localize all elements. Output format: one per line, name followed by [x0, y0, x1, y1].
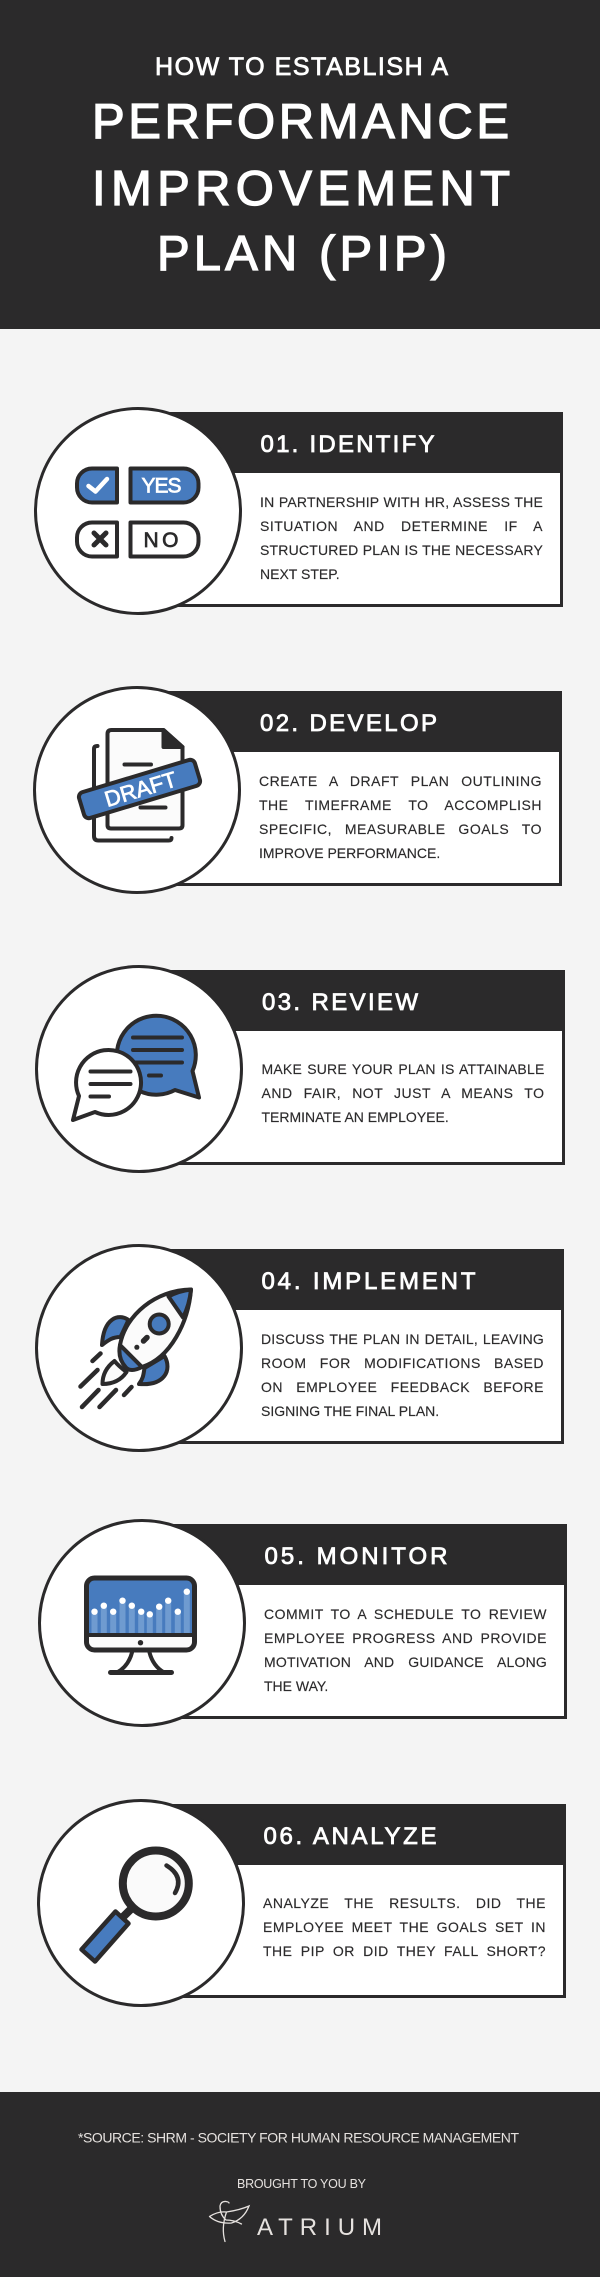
text: analyze description: ANALYZE THE RESULTS. DID THE — [263, 1894, 546, 1910]
text: identify description: SITUATION AND DETERMINE IF A — [260, 518, 543, 534]
text: review description: MAKE SURE YOUR PLAN IS ATTAINABLE — [262, 1061, 544, 1077]
header band — [0, 0, 600, 329]
panel: 05 monitor — [38, 1519, 567, 1727]
title: PERFORMANCE — [92, 95, 509, 149]
text: implement description — [261, 1330, 544, 1418]
title: HOW TO ESTABLISH A — [155, 53, 448, 81]
heading and icon: identify: YES — [141, 474, 181, 498]
text: monitor description: THE WAY. — [264, 1678, 328, 1694]
footer source, credit and logo: BROUGHT TO YOU BY — [237, 2177, 367, 2191]
text: implement description: SIGNING THE FINAL PLAN. — [261, 1402, 439, 1418]
heading and icon: develop: 02. DEVELOP — [260, 710, 436, 737]
heading and icon: implement — [35, 1244, 476, 1452]
title: PLAN (PIP) — [157, 227, 447, 281]
panel: 06 analyze — [37, 1799, 566, 2007]
text: develop description: SPECIFIC, MEASURABLE GOALS TO — [259, 820, 542, 836]
text: develop description: THE TIMEFRAME TO ACCOMPLISH — [259, 796, 542, 812]
heading and icon: monitor — [38, 1519, 447, 1727]
text: review description: AND FAIR, NOT JUST A MEANS TO — [262, 1085, 544, 1101]
footer source, credit and logo: *SOURCE: SHRM - SOCIETY FOR HUMAN RESOURCE MANAGEMENT — [78, 2130, 519, 2146]
heading and icon: develop — [33, 686, 436, 894]
text: develop description: CREATE A DRAFT PLAN OUTLINING — [259, 772, 542, 788]
text: identify description — [260, 494, 543, 582]
text: monitor description: MOTIVATION AND GUIDANCE ALONG — [264, 1654, 547, 1670]
panel: 01 identify — [34, 407, 563, 615]
text: review description: TERMINATE AN EMPLOYEE. — [262, 1109, 449, 1125]
text: identify description: NEXT STEP. — [260, 566, 340, 582]
heading and icon: implement: 04. IMPLEMENT — [261, 1268, 475, 1295]
heading and icon: develop: DRAFT — [101, 767, 179, 812]
title: IMPROVEMENT — [92, 162, 510, 216]
heading and icon: analyze — [37, 1799, 436, 2007]
heading and icon: identify — [34, 407, 435, 615]
text: monitor description: EMPLOYEE PROGRESS AND PROVIDE — [264, 1630, 547, 1646]
heading and icon: monitor: 05. MONITOR — [264, 1543, 447, 1570]
text: analyze description: EMPLOYEE MEET THE GOALS SET IN — [263, 1918, 546, 1934]
heading and icon: analyze: 06. ANALYZE — [263, 1822, 436, 1850]
text: analyze description: THE PIP OR DID THEY FALL SHORT? — [263, 1942, 546, 1958]
text: develop description — [259, 772, 542, 860]
text: monitor description: COMMIT TO A SCHEDULE TO REVIEW — [264, 1606, 547, 1622]
text: identify description: IN PARTNERSHIP WITH HR, ASSESS THE — [260, 494, 543, 510]
text: identify description: STRUCTURED PLAN IS THE NECESSARY — [260, 542, 543, 558]
text: implement description: ON EMPLOYEE FEEDBACK BEFORE — [261, 1378, 544, 1394]
panel: 03 review — [35, 965, 565, 1173]
heading and icon: review — [35, 965, 418, 1173]
text: develop description: IMPROVE PERFORMANCE. — [259, 844, 440, 860]
heading and icon: review: 03. REVIEW — [262, 989, 418, 1016]
panel: 04 implement — [35, 1244, 564, 1452]
text: analyze description — [263, 1894, 546, 1958]
title — [92, 53, 510, 281]
text: implement description: ROOM FOR MODIFICATIONS BASED — [261, 1354, 544, 1370]
panel: 02 develop — [33, 686, 562, 894]
text: review description — [262, 1061, 544, 1125]
text: monitor description — [264, 1606, 547, 1694]
heading and icon: identify: NO — [143, 529, 178, 552]
footer source, credit and logo: ATRIUM — [257, 2214, 382, 2241]
footer band — [0, 2092, 600, 2277]
heading and icon: identify: 01. IDENTIFY — [260, 431, 434, 458]
footer source, credit and logo — [78, 2130, 519, 2242]
text: implement description: DISCUSS THE PLAN IN DETAIL, LEAVING — [261, 1330, 544, 1346]
